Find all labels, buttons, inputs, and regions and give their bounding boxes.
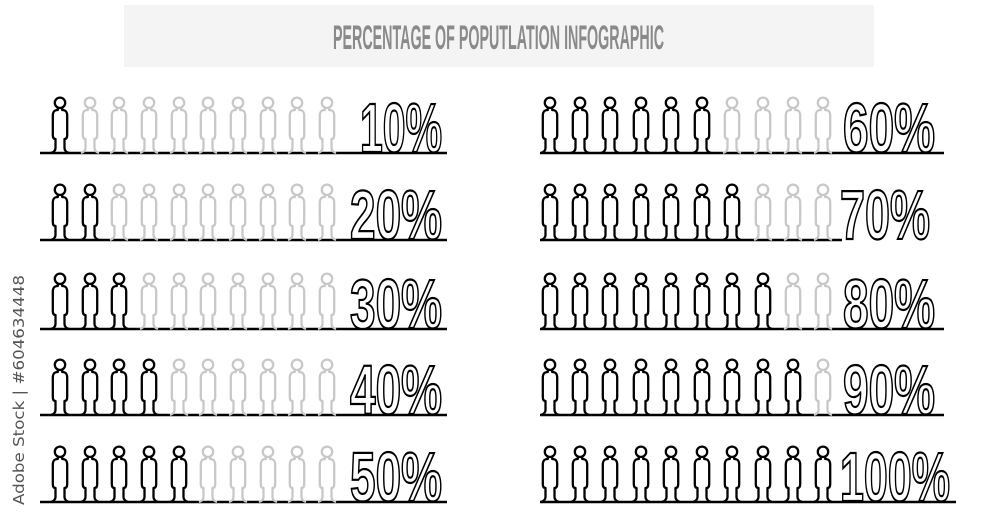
row: 50%: 50% xyxy=(350,438,442,516)
row: 40% xyxy=(40,351,447,429)
row: 60%: 60% xyxy=(843,89,935,167)
row: 80%: 80% xyxy=(843,265,935,343)
row: 10%: 10% xyxy=(360,89,442,167)
row: 20%: 20% xyxy=(350,176,442,254)
row: 40%: 40% xyxy=(350,351,442,429)
row: 10% xyxy=(40,89,447,167)
row: 60% xyxy=(540,89,944,167)
row: 90% xyxy=(540,351,944,429)
row: 100% xyxy=(540,438,956,516)
row: 90%: 90% xyxy=(843,351,935,429)
row: 70% xyxy=(540,176,930,254)
row: 30% xyxy=(40,265,447,343)
row: 50% xyxy=(40,438,447,516)
watermark: vertical stock id: Adobe Stock | #604634448 xyxy=(10,275,28,505)
row: 20% xyxy=(40,176,447,254)
row: 70%: 70% xyxy=(840,176,930,254)
title bar xyxy=(124,5,874,67)
row: 30%: 30% xyxy=(350,265,442,343)
row: 80% xyxy=(540,265,944,343)
